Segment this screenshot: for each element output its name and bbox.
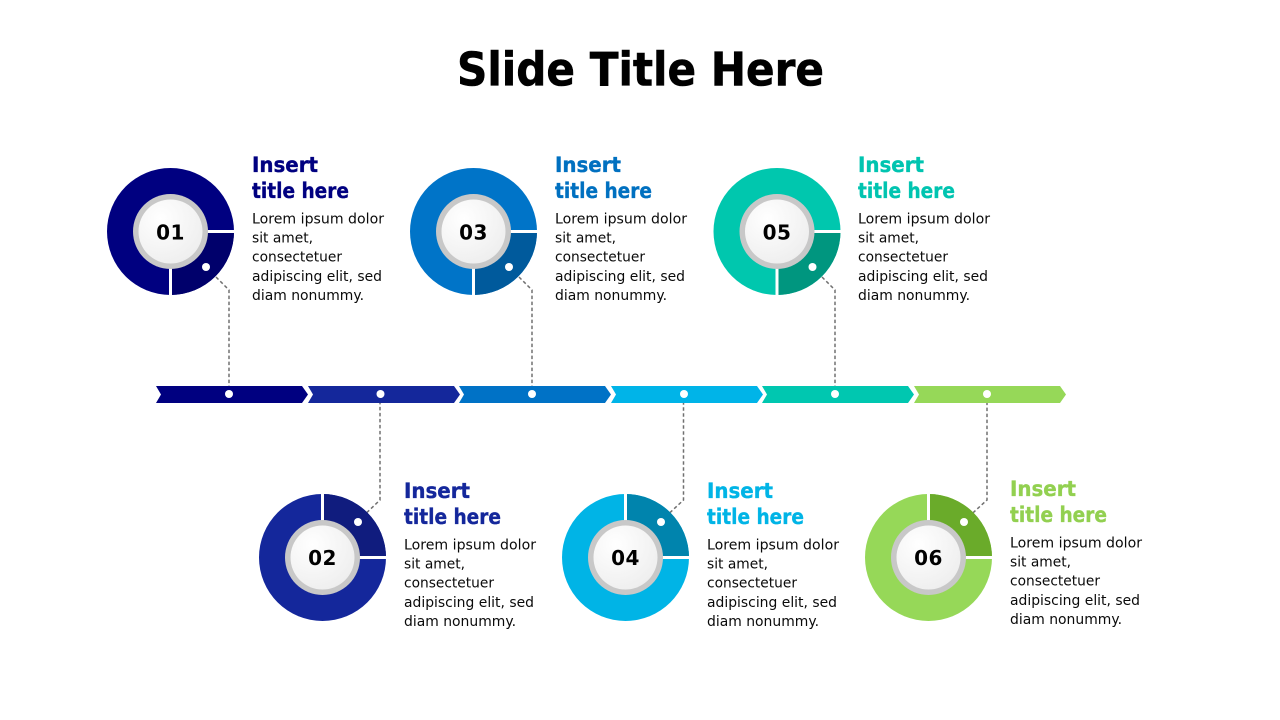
text block 02: adipiscing elit, sed xyxy=(404,595,534,611)
text block 06: diam nonummy. xyxy=(1010,612,1122,628)
text block 03 xyxy=(555,153,687,304)
connector lines xyxy=(216,277,987,521)
text block 03: title here xyxy=(555,179,652,203)
donut 01 xyxy=(107,168,234,296)
text block 02: title here xyxy=(404,505,501,529)
text block 06: Insert xyxy=(1010,477,1076,501)
text block 01: consectetuer xyxy=(252,250,342,266)
donut 02: 02 xyxy=(308,546,337,570)
text block 01: adipiscing elit, sed xyxy=(252,269,382,285)
text block 05: Lorem ipsum dolor xyxy=(858,212,990,228)
text block 06: adipiscing elit, sed xyxy=(1010,593,1140,609)
text block 06: title here xyxy=(1010,503,1107,527)
text block 04: adipiscing elit, sed xyxy=(707,595,837,611)
text block 02: consectetuer xyxy=(404,576,494,592)
text block 01: diam nonummy. xyxy=(252,288,364,304)
donut 06 xyxy=(865,494,992,621)
text block 05: diam nonummy. xyxy=(858,288,970,304)
text block 05: adipiscing elit, sed xyxy=(858,269,988,285)
donut 04: 04 xyxy=(611,546,640,570)
text block 04 xyxy=(707,479,839,630)
text block 02: sit amet, xyxy=(404,556,465,572)
segment 2 xyxy=(308,386,460,403)
donut 04 xyxy=(562,494,690,621)
text block 04: Insert xyxy=(707,479,773,503)
text block 04: diam nonummy. xyxy=(707,614,819,630)
text block 04: title here xyxy=(707,505,804,529)
segment 3 xyxy=(459,386,611,403)
text block 05: title here xyxy=(858,179,955,203)
donut 01: 01 xyxy=(156,220,185,244)
text block 06: consectetuer xyxy=(1010,574,1100,590)
text block 03: Insert xyxy=(555,153,621,177)
text block 03: Lorem ipsum dolor xyxy=(555,212,687,228)
text block 03: sit amet, xyxy=(555,230,616,246)
text block 01: Lorem ipsum dolor xyxy=(252,212,384,228)
text block 05: Insert xyxy=(858,153,924,177)
text block 01: Insert xyxy=(252,153,318,177)
donut 06: 06 xyxy=(914,546,943,570)
segment 1 xyxy=(156,386,308,403)
text block 06: Lorem ipsum dolor xyxy=(1010,536,1142,552)
donut 02 xyxy=(259,494,386,621)
text block 04: consectetuer xyxy=(707,576,797,592)
title: Slide Title Here xyxy=(457,42,824,96)
text block 04: Lorem ipsum dolor xyxy=(707,538,839,554)
donut 03: 03 xyxy=(459,220,488,244)
text block 02: Insert xyxy=(404,479,470,503)
donut 05 xyxy=(714,168,841,296)
text block 01: sit amet, xyxy=(252,230,313,246)
text block 06: sit amet, xyxy=(1010,554,1071,570)
donut 03 xyxy=(410,168,538,296)
text block 04: sit amet, xyxy=(707,556,768,572)
donut 05: 05 xyxy=(763,220,791,244)
text block 02 xyxy=(404,479,536,630)
timeline arrow bar xyxy=(156,386,1066,403)
text block 03: diam nonummy. xyxy=(555,288,667,304)
text block 05: consectetuer xyxy=(858,250,948,266)
segment 5 xyxy=(762,386,914,403)
timeline dots xyxy=(225,390,991,398)
text block 03: adipiscing elit, sed xyxy=(555,269,685,285)
text block 05: sit amet, xyxy=(858,230,919,246)
segment 6 xyxy=(914,386,1066,403)
text block 01 xyxy=(252,153,384,304)
text block 06 xyxy=(1010,477,1142,628)
text block 02: Lorem ipsum dolor xyxy=(404,538,536,554)
text block 05 xyxy=(858,153,990,304)
text block 02: diam nonummy. xyxy=(404,614,516,630)
text block 03: consectetuer xyxy=(555,250,645,266)
segment 4 xyxy=(611,386,763,403)
text block 01: title here xyxy=(252,179,349,203)
